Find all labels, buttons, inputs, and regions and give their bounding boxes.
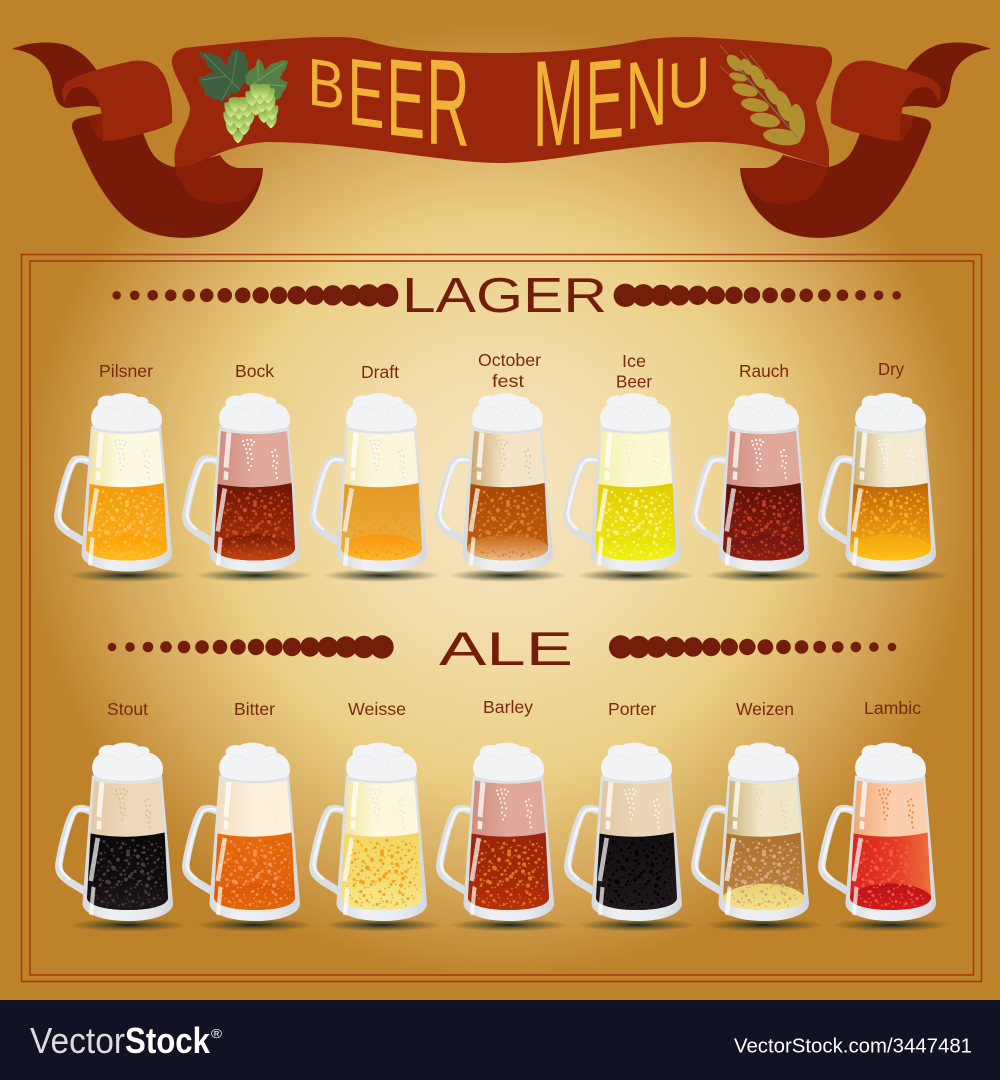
lager labels: Dry: [878, 359, 904, 379]
image URL: VectorStock.com/3447481: [734, 1036, 972, 1058]
footer bar: [0, 1000, 1000, 1080]
heading: LAGER: [112, 269, 901, 323]
ale labels: [107, 697, 921, 719]
icon: hop cone back: [245, 84, 278, 128]
ale labels: Bitter: [234, 699, 275, 719]
right dot row: [609, 635, 896, 659]
lager labels: Rauch: [739, 361, 789, 381]
ale labels: Weizen: [736, 699, 794, 719]
mug: Ice Beer: [567, 393, 695, 582]
title: BEER MENU: E: [585, 35, 624, 164]
title: BEER MENU: M: [532, 33, 584, 173]
icon: dark hop leaf: [199, 48, 250, 103]
lager labels: [99, 350, 904, 392]
ribbon right tail: [740, 42, 991, 238]
mug: Lambic: [822, 743, 950, 932]
lager labels: Pilsner: [99, 361, 153, 381]
icon: hop leaves and cones: [199, 48, 288, 143]
icon: hop cone front: [223, 97, 255, 143]
LAGER text: LAGER: [402, 269, 607, 323]
title: BEER MENU: [308, 33, 711, 173]
mug: Porter: [568, 743, 696, 932]
title: BEER MENU: B: [308, 45, 345, 125]
mug: Bitter: [186, 743, 314, 932]
title: BEER MENU: N: [626, 37, 667, 150]
ale labels: Lambic: [864, 698, 921, 718]
ale labels: Stout: [107, 699, 148, 719]
lager labels: Beer: [616, 372, 652, 392]
title: BEER MENU: E: [386, 34, 425, 162]
ale labels: Porter: [608, 699, 656, 719]
ribbon banner: [12, 33, 991, 238]
ale labels: Weisse: [348, 699, 406, 719]
mug: Pilsner: [58, 393, 186, 582]
icon: wheat ear: [720, 45, 807, 148]
lager labels: October: [478, 350, 541, 370]
ribbon left tail: [12, 42, 263, 238]
menu frame: [22, 254, 982, 982]
mug: Weisse: [313, 743, 441, 932]
heading: ALE: [108, 622, 896, 675]
lager labels: Draft: [361, 362, 399, 382]
mug: Barley: [440, 743, 568, 932]
logo: VectorStock: ®: [211, 1026, 222, 1041]
mug: Draft: [313, 393, 441, 582]
title: BEER MENU: U: [667, 42, 711, 126]
lager labels: Ice: [622, 351, 646, 371]
mug: Bock: [186, 393, 314, 582]
mug: Octoberfest: [439, 393, 567, 582]
right dot row: [614, 284, 901, 307]
mug: Weizen: [695, 743, 823, 932]
logo: VectorStock: [30, 1020, 222, 1061]
ale labels: Barley: [483, 697, 533, 717]
logo: VectorStock: Stock: [125, 1020, 211, 1061]
lager labels: fest: [492, 371, 524, 391]
title: BEER MENU: E: [348, 39, 384, 149]
mug: Dry: [822, 393, 950, 582]
ALE text: ALE: [439, 622, 573, 675]
icon: light hop leaf: [245, 58, 288, 100]
mug: Rauch: [695, 393, 823, 582]
title: BEER MENU: R: [426, 34, 470, 173]
logo: VectorStock: Vector: [30, 1020, 125, 1061]
ribbon main band: [172, 37, 832, 167]
lager labels: Bock: [235, 361, 274, 381]
left dot row: [112, 284, 398, 307]
left dot row: [108, 635, 394, 659]
mug: Stout: [59, 743, 187, 932]
